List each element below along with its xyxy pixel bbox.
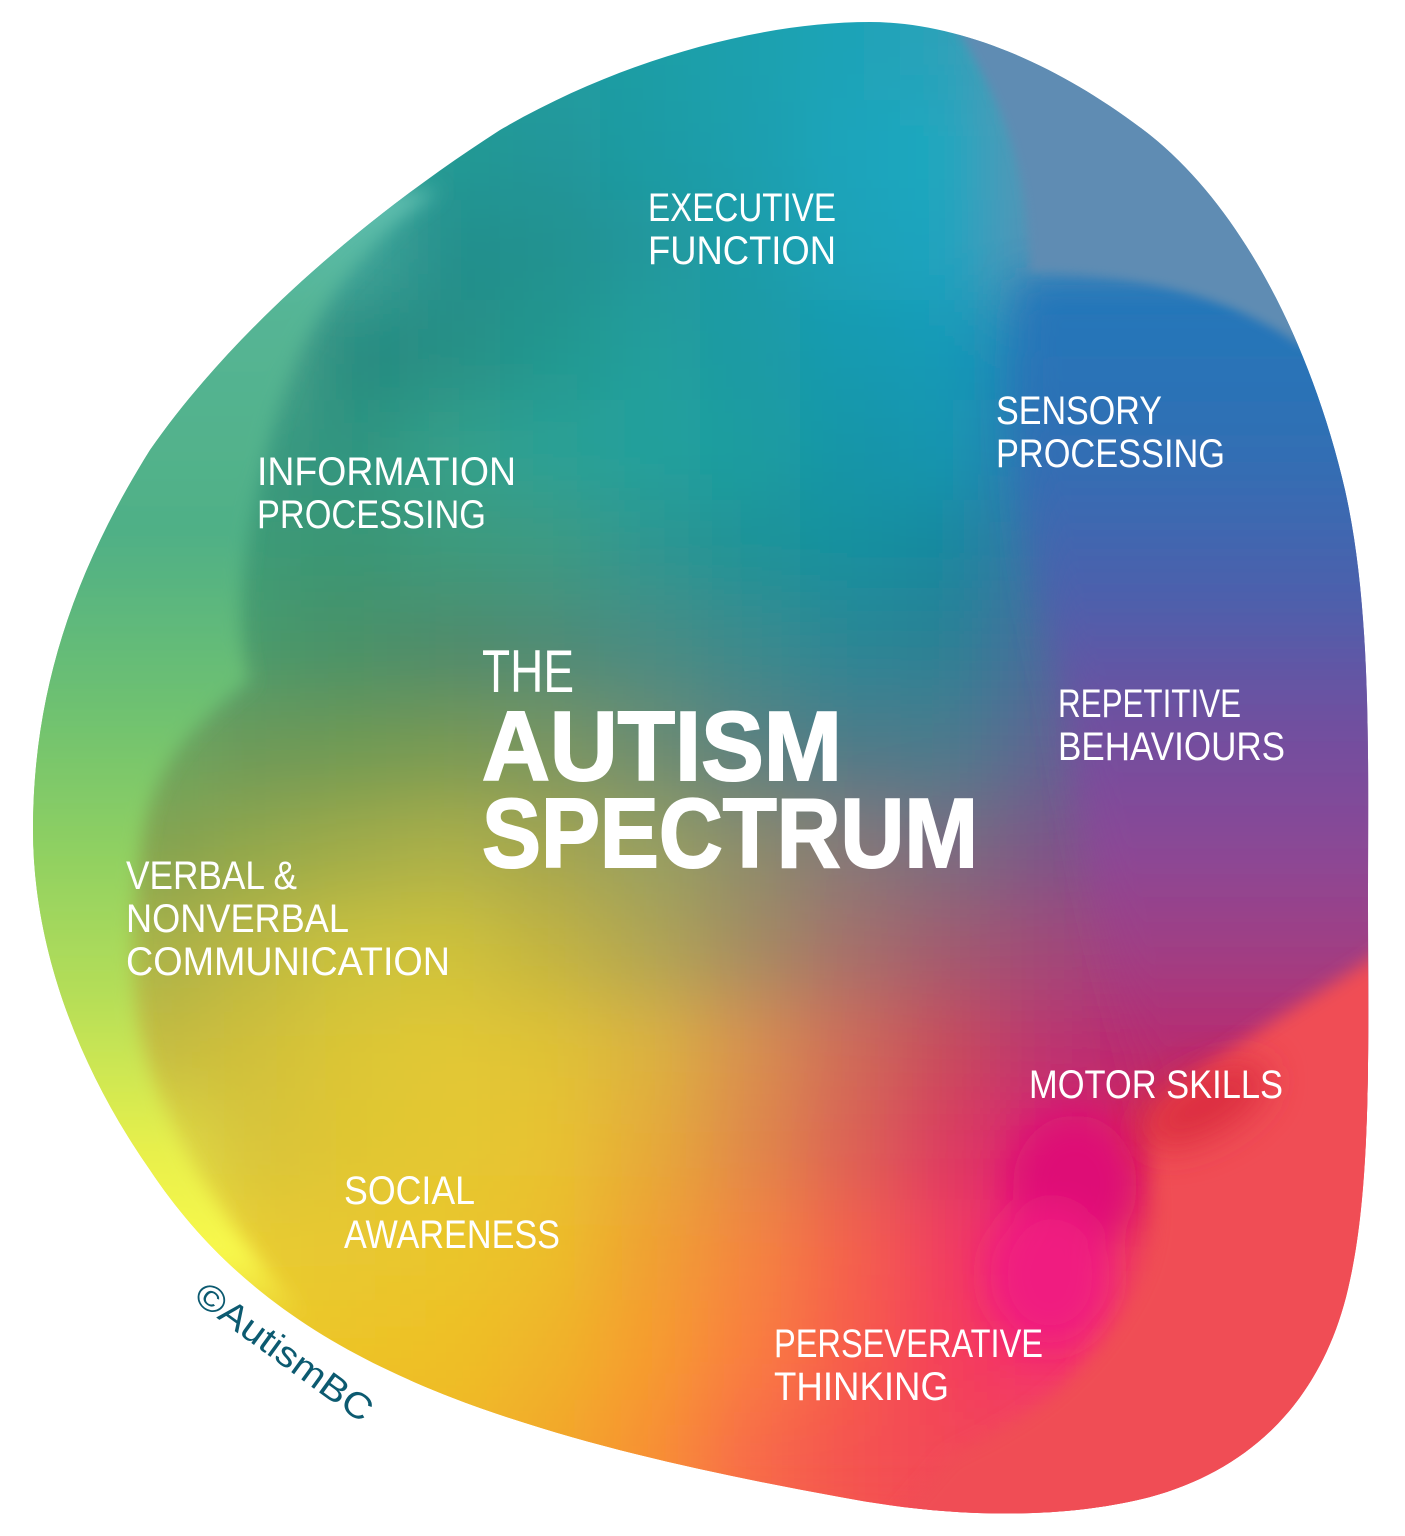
row 14 xyxy=(0,1400,1405,1536)
heading: the autism spectrum xyxy=(482,638,978,888)
copyright: ©AutismBC xyxy=(187,1273,381,1430)
row 12 xyxy=(0,1200,1405,1300)
label: verbal and nonverbal communication: NONVERBAL xyxy=(126,897,349,941)
label: social awareness xyxy=(344,1169,560,1257)
row 1 xyxy=(0,100,1405,200)
label: sensory processing xyxy=(996,389,1225,476)
label: social awareness: AWARENESS xyxy=(344,1213,560,1257)
heading: the autism spectrum: AUTISM xyxy=(482,691,842,801)
label: repetitive behaviours: REPETITIVE xyxy=(1058,682,1241,726)
label: executive function xyxy=(648,186,836,273)
row 6 xyxy=(0,600,1405,700)
label: perseverative thinking: PERSEVERATIVE xyxy=(774,1322,1043,1366)
label: information processing: INFORMATION xyxy=(257,450,516,494)
label: sensory processing: PROCESSING xyxy=(996,432,1225,476)
row 2 xyxy=(0,200,1405,300)
label: repetitive behaviours: BEHAVIOURS xyxy=(1058,725,1285,769)
row 3 xyxy=(0,300,1405,400)
row 11 xyxy=(0,1100,1405,1200)
row 10 xyxy=(0,1000,1405,1100)
label: social awareness: SOCIAL xyxy=(344,1169,475,1213)
label: sensory processing: SENSORY xyxy=(996,389,1162,433)
row 4 xyxy=(0,400,1405,500)
right colour band xyxy=(1019,280,1405,1140)
label: information processing: PROCESSING xyxy=(257,493,486,537)
row 0 xyxy=(448,22,1144,166)
dark red fold xyxy=(1137,1051,1276,1158)
row 8 xyxy=(0,800,1405,900)
row 13 xyxy=(0,1300,1405,1400)
label: information processing xyxy=(257,450,516,537)
magenta glow xyxy=(990,1115,1137,1345)
row 5 xyxy=(0,500,1405,600)
row 7 xyxy=(0,700,1405,800)
top right fold xyxy=(955,34,1299,348)
label: motor skills: MOTOR SKILLS xyxy=(1029,1063,1283,1107)
label: perseverative thinking xyxy=(774,1322,1043,1409)
label: verbal and nonverbal communication: VERBAL & xyxy=(126,854,297,898)
row 9 xyxy=(0,900,1405,1000)
heading: the autism spectrum: THE xyxy=(482,638,574,705)
label: repetitive behaviours xyxy=(1058,682,1285,769)
left outer rim xyxy=(33,184,436,1306)
heading: the autism spectrum: SPECTRUM xyxy=(482,778,978,888)
label: perseverative thinking: THINKING xyxy=(774,1365,949,1409)
label: executive function: FUNCTION xyxy=(648,229,836,273)
red corner xyxy=(900,948,1368,1514)
label: executive function: EXECUTIVE xyxy=(648,186,836,230)
label: verbal and nonverbal communication: COMMUNICATION xyxy=(126,940,450,984)
label: verbal and nonverbal communication xyxy=(126,854,450,984)
